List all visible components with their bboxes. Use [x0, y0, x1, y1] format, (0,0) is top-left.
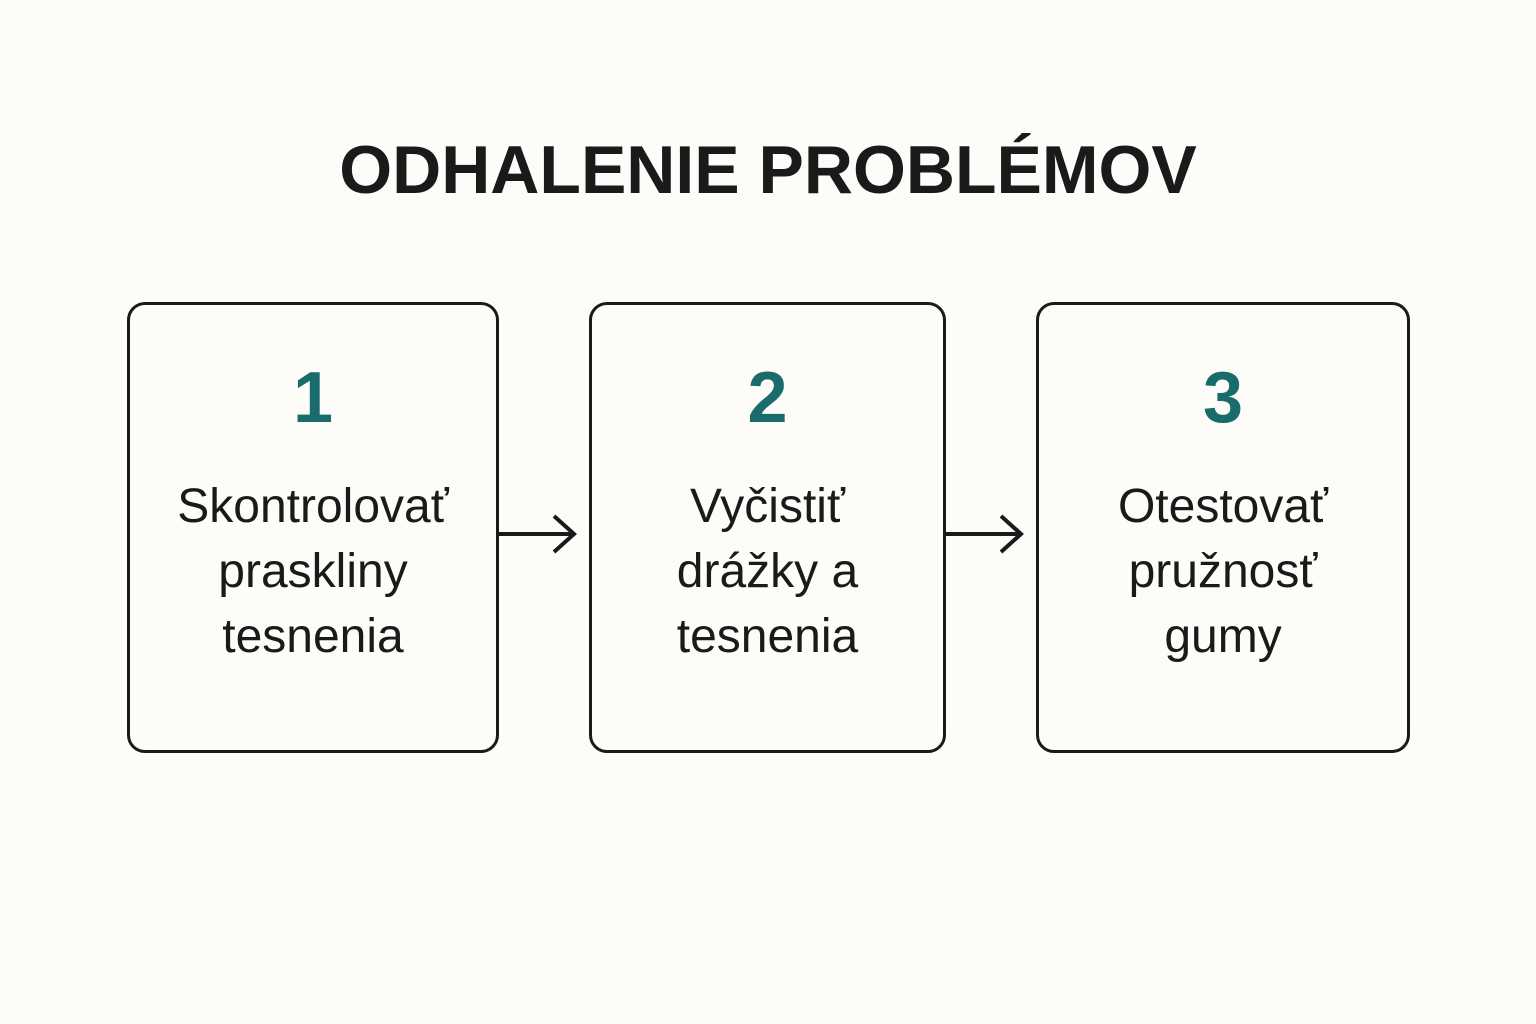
text step 1: Skontrolovať — [177, 480, 449, 533]
panel: step 2 — [589, 302, 946, 753]
panel: step 1 — [127, 302, 499, 753]
title: ODHALENIE PROBLÉMOV — [339, 132, 1197, 208]
text step 1 — [177, 480, 450, 663]
text step 1: tesnenia — [222, 610, 404, 663]
number 2: 2 — [747, 358, 788, 438]
text step 2 — [677, 480, 858, 663]
text step 2: Vyčistiť — [690, 480, 845, 533]
text step 3: Otestovať — [1118, 480, 1328, 533]
arrow 2 — [946, 514, 1024, 554]
text step 1: praskliny — [218, 545, 408, 598]
number 3: 3 — [1203, 358, 1243, 438]
text step 3 — [1118, 480, 1328, 663]
arrow 1 — [499, 514, 577, 554]
text step 3: gumy — [1164, 610, 1282, 663]
text step 3: pružnosť — [1129, 545, 1317, 598]
text step 2: tesnenia — [677, 610, 858, 663]
number 1: 1 — [293, 358, 333, 438]
text step 2: drážky a — [677, 545, 858, 598]
panel: step 3 — [1036, 302, 1410, 753]
